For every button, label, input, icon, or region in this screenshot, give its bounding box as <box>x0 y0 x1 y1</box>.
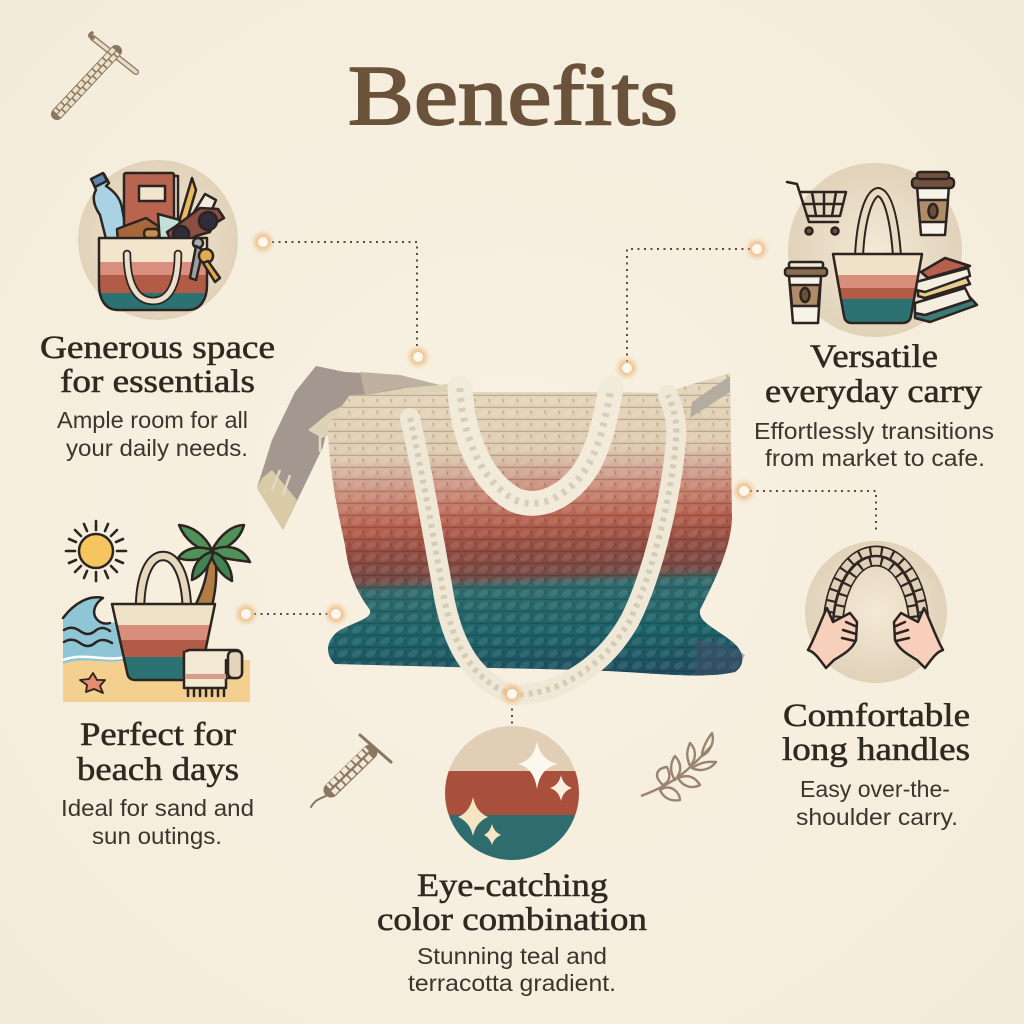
books <box>915 258 977 322</box>
icon: crochet hook top left <box>55 33 136 116</box>
text: beach days: Ideal for sand and <box>61 795 254 821</box>
text: colour combination: Stunning teal and <box>417 943 607 969</box>
panel: bag photo <box>257 366 745 695</box>
tissue <box>158 214 180 244</box>
heading: versatile carry: everyday carry <box>765 374 983 410</box>
icon: crochet hook lower <box>311 735 391 807</box>
heading: versatile carry <box>765 339 983 410</box>
heading: generous space <box>40 330 275 400</box>
wallet <box>117 218 159 243</box>
heading: beach days: Perfect for <box>80 717 236 753</box>
text: generous space <box>57 407 248 461</box>
starfish <box>80 673 105 693</box>
pencil and tube <box>179 178 216 226</box>
towel <box>257 366 450 530</box>
right hand <box>894 608 943 668</box>
bag <box>859 192 897 256</box>
text: generous space: your daily needs. <box>66 435 248 461</box>
icon: colour combination disc <box>445 726 579 860</box>
icon: versatile carry <box>785 163 977 337</box>
text: versatile carry: Effortlessly transitions <box>754 418 994 444</box>
cup bottom left <box>785 262 827 323</box>
sunglasses <box>167 208 224 243</box>
heading: comfortable handles: long handles <box>782 732 970 768</box>
sand <box>63 660 250 702</box>
braid <box>828 551 924 622</box>
palm tree <box>178 525 250 606</box>
long strap <box>410 395 676 695</box>
heading: colour combination: color combination <box>377 902 647 938</box>
bottle <box>91 173 128 243</box>
text: versatile carry <box>754 418 994 471</box>
heading: beach days <box>77 717 239 788</box>
text: comfortable handles: shoulder carry. <box>796 804 958 830</box>
left hand <box>808 608 857 668</box>
text: versatile carry: from market to cafe. <box>765 445 985 471</box>
text: colour combination: terracotta gradient. <box>408 970 616 996</box>
heading: beach days: beach days <box>77 752 239 788</box>
text: comfortable handles: Easy over-the- <box>800 776 950 802</box>
short strap <box>460 388 611 503</box>
notebook <box>124 173 178 231</box>
icon: bag of essentials <box>78 160 238 320</box>
connector lines <box>254 242 876 725</box>
heading: colour combination: Eye-catching <box>417 868 608 904</box>
text: generous space: Ample room for all <box>57 407 248 433</box>
bag <box>99 238 207 310</box>
towel <box>184 650 242 696</box>
sun <box>66 521 126 581</box>
bag <box>140 556 187 610</box>
heading: versatile carry: Versatile <box>810 339 938 375</box>
heading: generous space: for essentials <box>60 364 255 400</box>
cup top right <box>912 172 954 235</box>
icon: braided handle and hands <box>805 541 947 683</box>
water <box>63 597 125 664</box>
heading: colour combination <box>377 868 647 938</box>
cart <box>787 182 846 234</box>
heading: generous space: Generous space <box>40 330 275 366</box>
text: comfortable handles <box>796 776 958 830</box>
callout markers <box>233 229 770 707</box>
keys <box>190 238 220 282</box>
text: beach days <box>61 795 254 849</box>
heading: comfortable handles <box>782 698 970 768</box>
title: Benefits <box>348 49 678 143</box>
heading: comfortable handles: Comfortable <box>783 698 970 734</box>
icon: leaf sprig <box>641 733 716 800</box>
icon: beach scene <box>63 521 250 702</box>
text: beach days: sun outings. <box>92 823 222 849</box>
text: colour combination <box>408 943 616 996</box>
sparkles <box>518 741 558 789</box>
bag body <box>328 373 742 675</box>
